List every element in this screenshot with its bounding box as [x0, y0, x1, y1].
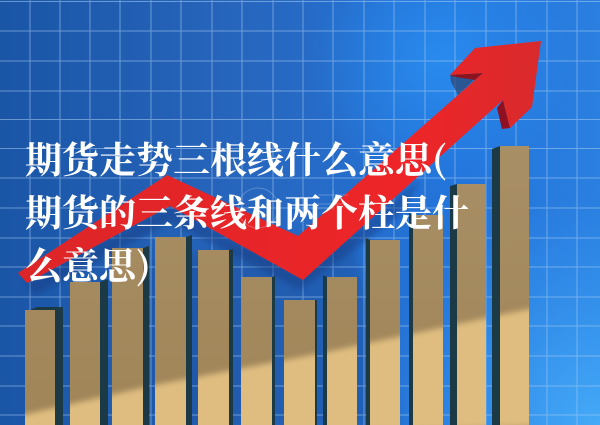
- red arrow: [18, 41, 541, 283]
- title: 么意思): [25, 236, 151, 290]
- watermark: [238, 188, 348, 228]
- title: [25, 130, 469, 290]
- bar side faces: [30, 146, 500, 425]
- title: 期货的三条线和两个柱是什: [25, 183, 469, 237]
- bar front faces: [25, 146, 529, 425]
- bars: [25, 146, 529, 425]
- arrow shadow: [27, 180, 420, 295]
- title: 期货走势三根线什么意思(: [25, 130, 447, 184]
